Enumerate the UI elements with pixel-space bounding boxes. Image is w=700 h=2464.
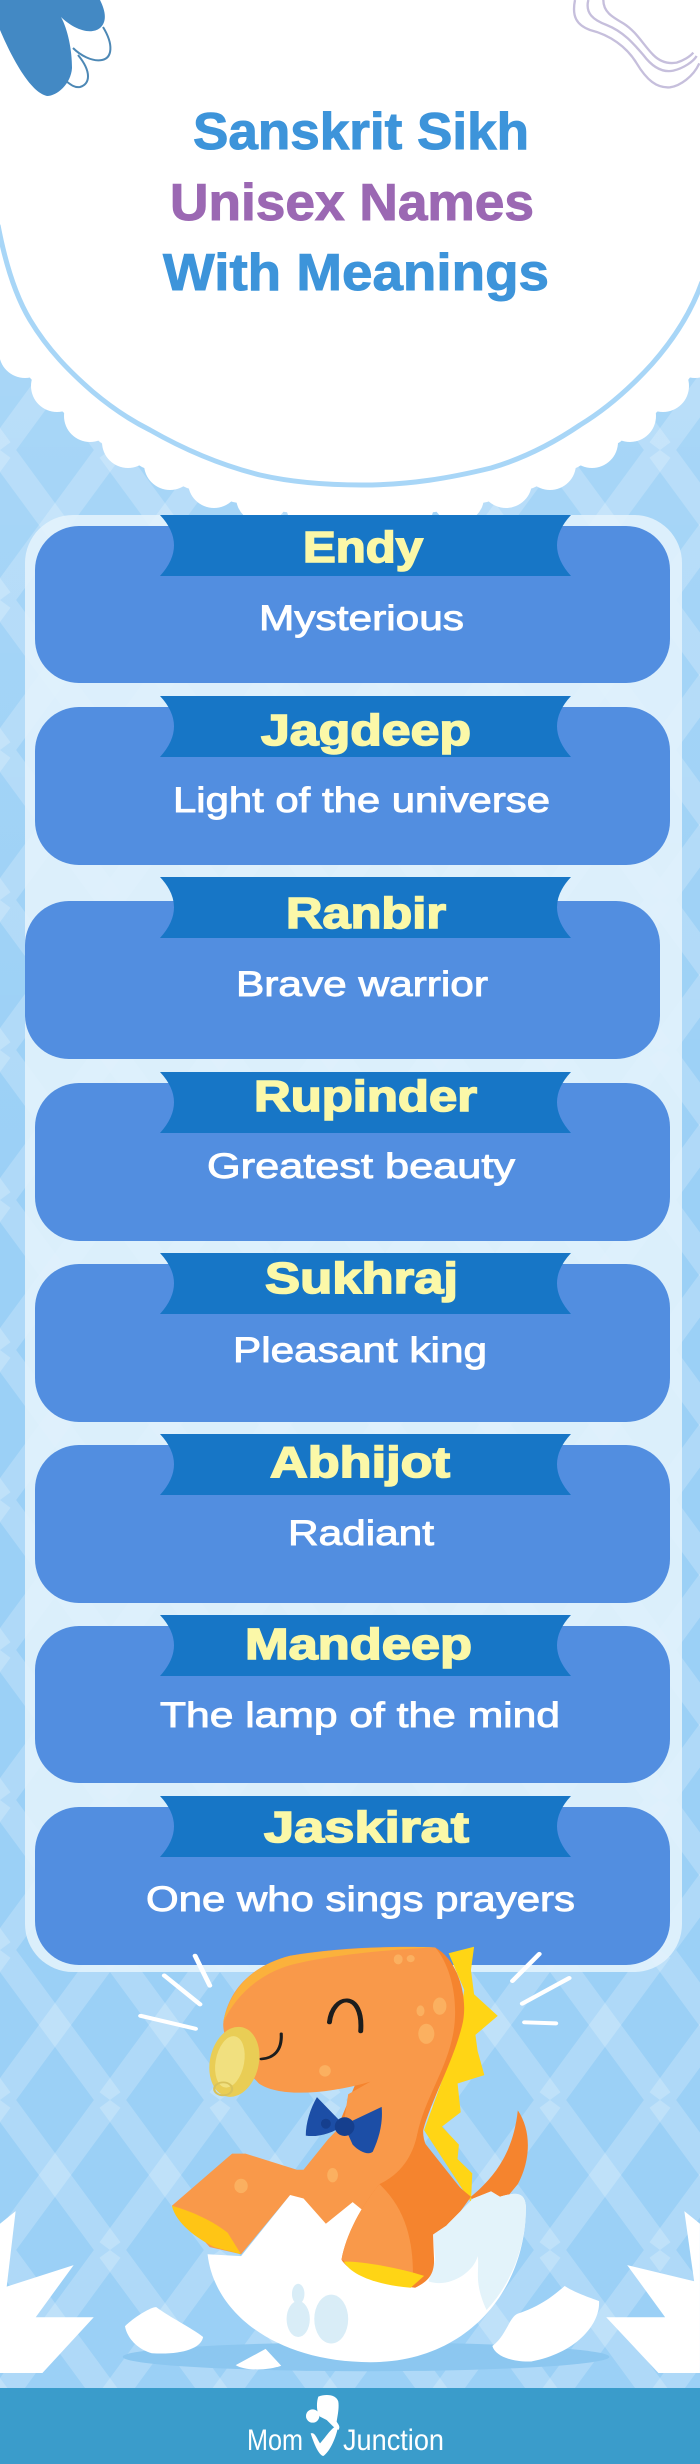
head and body — [172, 1947, 455, 2260]
card: Ranbir — [25, 877, 660, 1059]
card: Endy — [35, 515, 670, 683]
card: Mandeep — [35, 1615, 670, 1783]
eyes — [329, 2000, 361, 2031]
logo: MomJunction: Junction — [343, 2424, 444, 2457]
card: Mandeep: Mandeep — [245, 1620, 472, 1669]
card: Ranbir: Brave warrior — [236, 965, 488, 1004]
card: Abhijot — [35, 1434, 670, 1603]
card: Jaskirat — [35, 1796, 670, 1965]
card: Abhijot: Radiant — [288, 1514, 434, 1553]
head highlight — [223, 1947, 435, 2022]
title: Sanskrit Sikh — [193, 103, 529, 161]
footer band — [0, 2388, 700, 2464]
card: Sukhraj: Sukhraj — [265, 1254, 458, 1303]
card: Rupinder: Greatest beauty — [207, 1147, 516, 1186]
front leg — [341, 2134, 469, 2288]
logo: MomJunction: Mom — [247, 2424, 303, 2457]
card: Mandeep: The lamp of the mind — [160, 1696, 560, 1735]
card: Endy: Mysterious — [259, 599, 464, 638]
card: Ranbir: Ranbir — [286, 889, 446, 938]
spines — [424, 1947, 498, 2202]
egg shell — [208, 2191, 526, 2362]
title: With Meanings — [163, 244, 549, 302]
sparkle lines — [141, 1954, 569, 2029]
card: Jagdeep: Light of the universe — [173, 781, 550, 820]
card: Jaskirat: Jaskirat — [264, 1803, 469, 1852]
left foot — [172, 2206, 241, 2254]
blue bow tie — [306, 2097, 382, 2153]
card: Sukhraj: Pleasant king — [233, 1331, 487, 1370]
skin spots — [234, 1954, 446, 2248]
pacifier — [204, 2024, 265, 2100]
title — [163, 103, 549, 302]
panel: names list backdrop — [25, 515, 682, 1972]
card: Rupinder: Rupinder — [254, 1072, 477, 1121]
card: Rupinder — [35, 1072, 670, 1241]
broken shell pieces — [125, 2307, 203, 2354]
icon: top-left blue leaf decoration — [0, 0, 110, 96]
ground shadow — [123, 2342, 609, 2371]
title: Unisex Names — [170, 174, 534, 232]
egg shade — [429, 2191, 526, 2310]
illustration: baby dinosaur hatching from egg — [0, 1947, 700, 2373]
card: Jagdeep — [35, 696, 670, 865]
card: Sukhraj — [35, 1253, 670, 1422]
icon: top-right wavy lines — [574, 0, 699, 87]
tail — [469, 2110, 528, 2200]
card: Jaskirat: One who sings prayers — [146, 1880, 575, 1919]
card: Jagdeep: Jagdeep — [261, 706, 471, 755]
card: Endy: Endy — [303, 523, 424, 572]
header scalloped circle — [0, 0, 700, 534]
logo: MomJunction — [247, 2395, 444, 2457]
white corner shards — [0, 2211, 700, 2373]
card: Abhijot: Abhijot — [270, 1438, 450, 1487]
egg spots — [287, 2284, 348, 2344]
body shade — [312, 1947, 471, 2287]
